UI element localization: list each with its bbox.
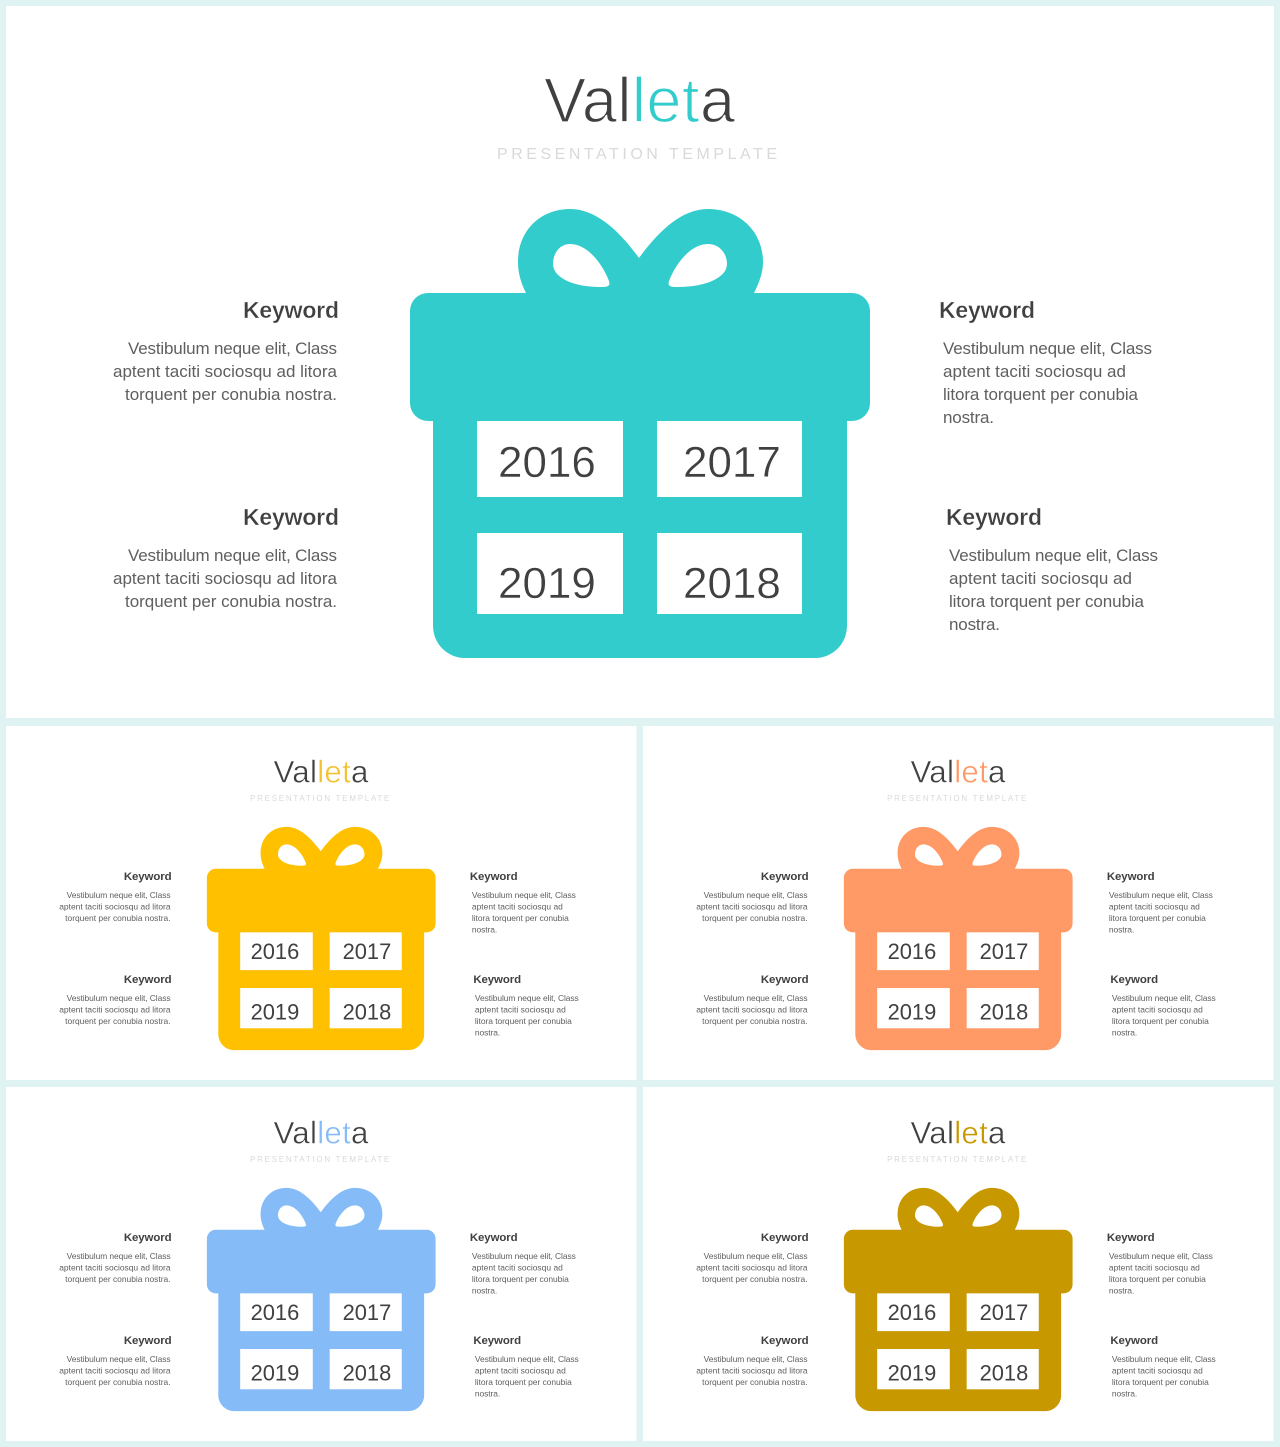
year box: 2018 [967, 988, 1039, 1028]
text block: bottom right: aptent taciti sociosqu ad [475, 1365, 566, 1375]
panel: gold slide [643, 1087, 1273, 1441]
year box: 2016: 2016 [498, 438, 596, 487]
year box: 2019 [877, 1349, 950, 1389]
year box: 2017: 2017 [343, 1300, 391, 1325]
title: Valleta [273, 1116, 369, 1151]
text block: top left: aptent taciti sociosqu ad litora [696, 901, 808, 911]
text block: bottom right: litora torquent per conubia [475, 1016, 572, 1026]
text block: bottom left: torquent per conubia nostra. [702, 1377, 808, 1387]
text block: top right: nostra. [472, 924, 497, 934]
text block: top right: litora torquent per conubia [472, 913, 569, 923]
text block: top left [696, 1232, 809, 1284]
year box: 2018 [330, 1349, 402, 1389]
text block: bottom right: aptent taciti sociosqu ad [475, 1004, 566, 1014]
icon: gift box [410, 209, 870, 658]
year box: 2017 [967, 932, 1039, 970]
text block: bottom left: Keyword [761, 1335, 809, 1347]
text block: bottom right: Vestibulum neque elit, Class [1112, 1354, 1216, 1364]
text block: top right: Keyword [939, 297, 1035, 323]
text block: top left: torquent per conubia nostra. [702, 1274, 808, 1284]
text block: bottom left: torquent per conubia nostra. [702, 1016, 808, 1026]
year box: 2019: 2019 [888, 1360, 936, 1385]
title: Valleta [910, 755, 1006, 790]
title: Valleta [273, 755, 369, 790]
text block: bottom right: nostra. [1112, 1388, 1137, 1398]
text block: bottom left: Keyword [761, 974, 809, 986]
text block: top right: Vestibulum neque elit, Class [1109, 890, 1213, 900]
subtitle: PRESENTATION TEMPLATE [887, 794, 1026, 803]
text block: top left: Keyword [761, 871, 809, 883]
text block: top left: torquent per conubia nostra. [65, 1274, 171, 1284]
text block: top left: aptent taciti sociosqu ad litora [696, 1262, 808, 1272]
text block: bottom right: aptent taciti sociosqu ad [949, 569, 1132, 588]
text block: bottom left: aptent taciti sociosqu ad litora [696, 1004, 808, 1014]
panel: orange slide [643, 726, 1273, 1080]
panel: blue slide [6, 1087, 636, 1441]
text block: bottom right: Vestibulum neque elit, Class [1112, 993, 1216, 1003]
text block: bottom left: Vestibulum neque elit, Class [704, 993, 808, 1003]
text block: top right [939, 297, 1152, 427]
text block: bottom left: Keyword [243, 504, 339, 530]
year box: 2019 [240, 1349, 313, 1389]
text block: bottom left: Keyword [124, 974, 172, 986]
text block: bottom right: litora torquent per conubia [949, 592, 1145, 611]
text block: bottom left: Vestibulum neque elit, Class [704, 1354, 808, 1364]
year box: 2017 [330, 932, 402, 970]
text block: top left: Keyword [124, 1232, 172, 1244]
icon: gift box [207, 1188, 436, 1411]
year box: 2018 [967, 1349, 1039, 1389]
text block: top right: nostra. [1109, 1285, 1134, 1295]
text block: bottom right: Vestibulum neque elit, Class [949, 546, 1158, 565]
text block: bottom right: nostra. [1112, 1027, 1137, 1037]
text block: top right: Keyword [1107, 871, 1155, 883]
year box: 2019 [477, 533, 623, 614]
year box: 2016 [240, 932, 313, 970]
text block: bottom left: aptent taciti sociosqu ad litora [59, 1004, 171, 1014]
text block: top left: Vestibulum neque elit, Class [128, 339, 337, 358]
text block: bottom right: Vestibulum neque elit, Class [475, 993, 579, 1003]
text block: top left: Vestibulum neque elit, Class [67, 890, 171, 900]
text block: top left [113, 297, 339, 404]
year box: 2019: 2019 [251, 1360, 299, 1385]
year box: 2016 [877, 1293, 950, 1331]
text block: bottom right: Vestibulum neque elit, Class [475, 1354, 579, 1364]
text block: bottom right: nostra. [949, 615, 1000, 634]
text block: bottom right [473, 974, 579, 1037]
text block: top left [59, 1232, 172, 1284]
text block: bottom right [1110, 1335, 1216, 1398]
text block: bottom left: aptent taciti sociosqu ad litora [696, 1365, 808, 1375]
text block: top left: aptent taciti sociosqu ad litora [113, 362, 338, 381]
text block: top left: torquent per conubia nostra. [702, 913, 808, 923]
text block: bottom right: aptent taciti sociosqu ad [1112, 1365, 1203, 1375]
text block: bottom right: litora torquent per conubia [1112, 1377, 1209, 1387]
year box: 2019: 2019 [251, 999, 299, 1024]
year box: 2016 [477, 421, 623, 497]
text block: bottom right: Keyword [1110, 1335, 1158, 1347]
text block: top left: Keyword [124, 871, 172, 883]
text block: top right: litora torquent per conubia [472, 1274, 569, 1284]
title: Valleta [910, 1116, 1006, 1151]
icon: gift box [844, 1188, 1073, 1411]
text block: bottom left: aptent taciti sociosqu ad litora [113, 569, 338, 588]
text block: bottom left [696, 1335, 809, 1387]
text block: top left: Keyword [761, 1232, 809, 1244]
year box: 2018: 2018 [980, 999, 1028, 1024]
year box: 2019: 2019 [498, 559, 596, 608]
year box: 2019 [240, 988, 313, 1028]
subtitle: PRESENTATION TEMPLATE [250, 1155, 389, 1164]
text block: top right: Vestibulum neque elit, Class [472, 1251, 576, 1261]
text block: top right: aptent taciti sociosqu ad [1109, 1262, 1200, 1272]
text block: bottom right: Keyword [473, 974, 521, 986]
text block: top left: Vestibulum neque elit, Class [704, 890, 808, 900]
year box: 2016: 2016 [888, 939, 936, 964]
text block: top right: litora torquent per conubia [943, 385, 1139, 404]
text block: top left [696, 871, 809, 923]
text block: top right: nostra. [1109, 924, 1134, 934]
subtitle: PRESENTATION TEMPLATE [887, 1155, 1026, 1164]
year box: 2019 [877, 988, 950, 1028]
year box: 2017 [967, 1293, 1039, 1331]
text block: bottom right: litora torquent per conubia [1112, 1016, 1209, 1026]
text block: top left: torquent per conubia nostra. [125, 385, 337, 404]
text block: top left: aptent taciti sociosqu ad litora [59, 1262, 171, 1272]
year box: 2016 [877, 932, 950, 970]
text block: bottom left: Vestibulum neque elit, Class [67, 1354, 171, 1364]
text block: top right: Keyword [470, 871, 518, 883]
text block: top left: Vestibulum neque elit, Class [67, 1251, 171, 1261]
year box: 2016 [240, 1293, 313, 1331]
text block: bottom left: torquent per conubia nostra. [65, 1016, 171, 1026]
year box: 2016: 2016 [888, 1300, 936, 1325]
text block: bottom right: Keyword [473, 1335, 521, 1347]
text block: top right [1107, 1232, 1213, 1295]
text block: bottom right: Keyword [1110, 974, 1158, 986]
text block: top left: Keyword [243, 297, 339, 323]
text block: top right: aptent taciti sociosqu ad [472, 901, 563, 911]
year box: 2018 [657, 533, 802, 614]
text block: top right: Vestibulum neque elit, Class [472, 890, 576, 900]
text block: bottom right: litora torquent per conubia [475, 1377, 572, 1387]
text block: top right: nostra. [472, 1285, 497, 1295]
text block: bottom left [59, 1335, 172, 1387]
year box: 2017: 2017 [980, 1300, 1028, 1325]
text block: top right: Vestibulum neque elit, Class [1109, 1251, 1213, 1261]
text block: top right [1107, 871, 1213, 934]
year box: 2018: 2018 [343, 1360, 391, 1385]
text block: top right: litora torquent per conubia [1109, 1274, 1206, 1284]
text block: bottom right: Keyword [946, 504, 1042, 530]
year box: 2017: 2017 [343, 939, 391, 964]
text block: bottom right: nostra. [475, 1027, 500, 1037]
text block: bottom left: Vestibulum neque elit, Class [67, 993, 171, 1003]
text block: bottom left: Keyword [124, 1335, 172, 1347]
text block: bottom left: aptent taciti sociosqu ad litora [59, 1365, 171, 1375]
icon: gift box [844, 827, 1073, 1050]
text block: top left: aptent taciti sociosqu ad litora [59, 901, 171, 911]
text block: top left: Vestibulum neque elit, Class [704, 1251, 808, 1261]
text block: bottom right [473, 1335, 579, 1398]
text block: bottom left [113, 504, 339, 611]
text block: bottom right [946, 504, 1158, 634]
text block: top right: litora torquent per conubia [1109, 913, 1206, 923]
text block: bottom right: aptent taciti sociosqu ad [1112, 1004, 1203, 1014]
text block: top left [59, 871, 172, 923]
year box: 2018: 2018 [343, 999, 391, 1024]
year box: 2016: 2016 [251, 939, 299, 964]
subtitle: PRESENTATION TEMPLATE [497, 146, 777, 163]
text block: top right: nostra. [943, 408, 994, 427]
text block: bottom left [59, 974, 172, 1026]
year box: 2017 [330, 1293, 402, 1331]
panel: teal main slide [6, 6, 1274, 718]
year box: 2016: 2016 [251, 1300, 299, 1325]
text block: bottom left [696, 974, 809, 1026]
year box: 2018: 2018 [980, 1360, 1028, 1385]
text block: top right: Keyword [470, 1232, 518, 1244]
subtitle: PRESENTATION TEMPLATE [250, 794, 389, 803]
text block: bottom left: torquent per conubia nostra. [65, 1377, 171, 1387]
year box: 2018 [330, 988, 402, 1028]
text block: top right [470, 1232, 576, 1295]
year box: 2017: 2017 [980, 939, 1028, 964]
title: Valleta [544, 66, 736, 136]
year box: 2019: 2019 [888, 999, 936, 1024]
year box: 2017: 2017 [683, 438, 781, 487]
text block: bottom left: Vestibulum neque elit, Class [128, 546, 337, 565]
text block: top right: Vestibulum neque elit, Class [943, 339, 1152, 358]
text block: top right: aptent taciti sociosqu ad [1109, 901, 1200, 911]
panel: yellow slide [6, 726, 636, 1080]
text block: bottom left: torquent per conubia nostra. [125, 592, 337, 611]
text block: top right: Keyword [1107, 1232, 1155, 1244]
text block: top left: torquent per conubia nostra. [65, 913, 171, 923]
text block: top right [470, 871, 576, 934]
year box: 2017 [657, 421, 802, 497]
text block: bottom right [1110, 974, 1216, 1037]
text block: bottom right: nostra. [475, 1388, 500, 1398]
text block: top right: aptent taciti sociosqu ad [472, 1262, 563, 1272]
year box: 2018: 2018 [683, 559, 781, 608]
icon: gift box [207, 827, 436, 1050]
text block: top right: aptent taciti sociosqu ad [943, 362, 1126, 381]
